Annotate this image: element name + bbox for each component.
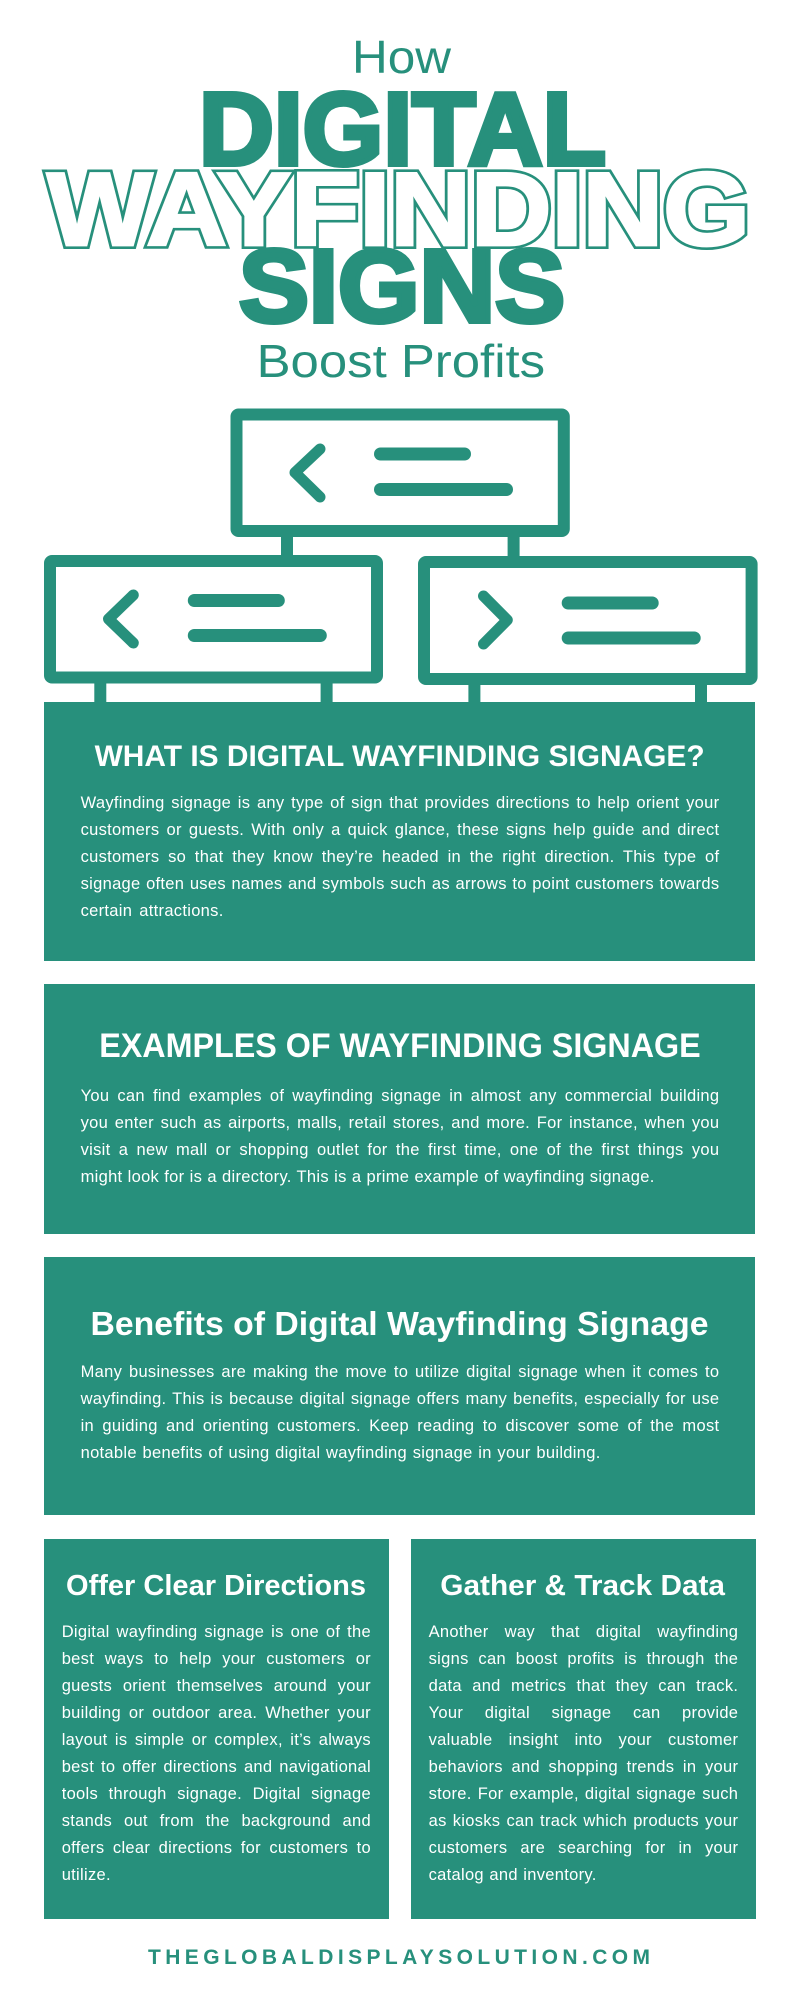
heading: benefits of digital wayfinding signage: Benefits of Digital Wayfinding Signage [91, 1305, 709, 1342]
text block: benefits of digital wayfinding signage: Many businesses are making the move to utilize digital signage when it comes to [81, 1363, 719, 1381]
text block: gather and track data: as kiosks can track which products your [429, 1812, 738, 1830]
icon: top sign [236, 414, 564, 556]
icon: left sign [50, 561, 377, 703]
text block: offer clear directions: stands out from the background and [62, 1812, 371, 1830]
text block: examples of wayfinding signage: You can find examples of wayfinding signage in almost any commercial building [81, 1087, 719, 1105]
text block: what is digital wayfinding signage: Wayfinding signage is any type of sign that provides directions to help orient your [81, 794, 719, 812]
text block: gather and track data: valuable insight into your customer [429, 1731, 738, 1749]
text block: what is digital wayfinding signage [80, 794, 720, 920]
text block: examples of wayfinding signage: might look for is a directory. This is a prime example of wayfinding signage. [81, 1168, 655, 1186]
heading: examples of wayfinding signage: EXAMPLES OF WAYFINDING SIGNAGE [99, 1027, 701, 1065]
text block: offer clear directions: tools through signage. Digital signage [62, 1785, 371, 1803]
title line: Boost Profits: Boost Profits [257, 335, 545, 387]
text block: gather and track data [428, 1623, 738, 1884]
heading: gather and track data: Gather & Track Data [440, 1570, 726, 1602]
text block: benefits of digital wayfinding signage: notable benefits of using digital wayfinding signage in your building. [81, 1444, 601, 1462]
text block: gather and track data: behaviors and shopping trends in your [429, 1758, 738, 1776]
text block: what is digital wayfinding signage: customers or guests. With only a quick glance, these signs help guide and direct [81, 821, 719, 839]
text block: examples of wayfinding signage [80, 1087, 719, 1186]
text block: offer clear directions: Digital wayfinding signage is one of the [62, 1623, 371, 1641]
text block: benefits of digital wayfinding signage: in guiding and orienting customers. Keep reading to discover some of the most [81, 1417, 719, 1435]
text block: offer clear directions: utilize. [62, 1866, 111, 1884]
text block: benefits of digital wayfinding signage [80, 1363, 719, 1462]
title [42, 31, 750, 387]
title line: WAYFINDING outlined: WAYFINDING [47, 152, 750, 268]
text block: offer clear directions: offers clear directions for customers to [62, 1839, 371, 1857]
title line: WAYFINDING outlined: WAYFINDING [47, 152, 750, 268]
text block: benefits of digital wayfinding signage: wayfinding. This is because digital signage offers many benefits, especially for use [81, 1390, 719, 1408]
panel: what is digital wayfinding signage [44, 702, 755, 961]
icon: right sign [424, 562, 752, 703]
text block: offer clear directions: building or outdoor area. Whether your [62, 1704, 371, 1722]
panel: gather and track data [411, 1539, 756, 1919]
text block: gather and track data: store. For example, digital signage such [429, 1785, 738, 1803]
text block: offer clear directions [62, 1623, 371, 1884]
text block: offer clear directions: best to offer directions and navigational [62, 1758, 371, 1776]
icon: wayfinding signs [44, 408, 758, 702]
title line: SIGNS: SIGNS [239, 228, 565, 344]
panel: benefits of digital wayfinding signage [44, 1257, 755, 1515]
heading: offer clear directions: Offer Clear Directions [66, 1570, 366, 1602]
text block: offer clear directions: layout is simple or complex, it’s always [62, 1731, 371, 1749]
text block: gather and track data: Your digital signage can provide [429, 1704, 738, 1722]
text block: examples of wayfinding signage: visit a new mall or shopping outlet for the first time, one of the first things you [81, 1141, 719, 1159]
title line: How: How [352, 31, 452, 83]
footer url: THEGLOBALDISPLAYSOLUTION.COM [148, 1946, 650, 1969]
text block: offer clear directions: best ways to help your customers or [62, 1650, 371, 1668]
text block: offer clear directions: guests orient themselves around your [62, 1677, 371, 1695]
title line: DIGITAL: DIGITAL [199, 72, 606, 186]
text block: gather and track data: data and metrics that they can track. [429, 1677, 738, 1695]
text block: gather and track data: signs can boost profits is through the [429, 1650, 738, 1668]
text block: what is digital wayfinding signage: customers so that they know they’re headed in the right direction. This type of [81, 848, 719, 866]
text block: what is digital wayfinding signage: signage often uses names and symbols such as arrows to point customers towards [81, 875, 719, 893]
text block: gather and track data: Another way that digital wayfinding [429, 1623, 738, 1641]
heading: what is digital wayfinding signage: WHAT IS DIGITAL WAYFINDING SIGNAGE? [95, 740, 705, 773]
text block: what is digital wayfinding signage: certain attractions. [81, 902, 224, 920]
text block: gather and track data: customers are searching for in your [429, 1839, 738, 1857]
text block: examples of wayfinding signage: you enter such as airports, malls, retail stores, and more. For instance, when you [81, 1114, 719, 1132]
text block: gather and track data: catalog and inventory. [429, 1866, 597, 1884]
panel: offer clear directions [44, 1539, 389, 1919]
panel: examples of wayfinding signage [44, 984, 755, 1234]
